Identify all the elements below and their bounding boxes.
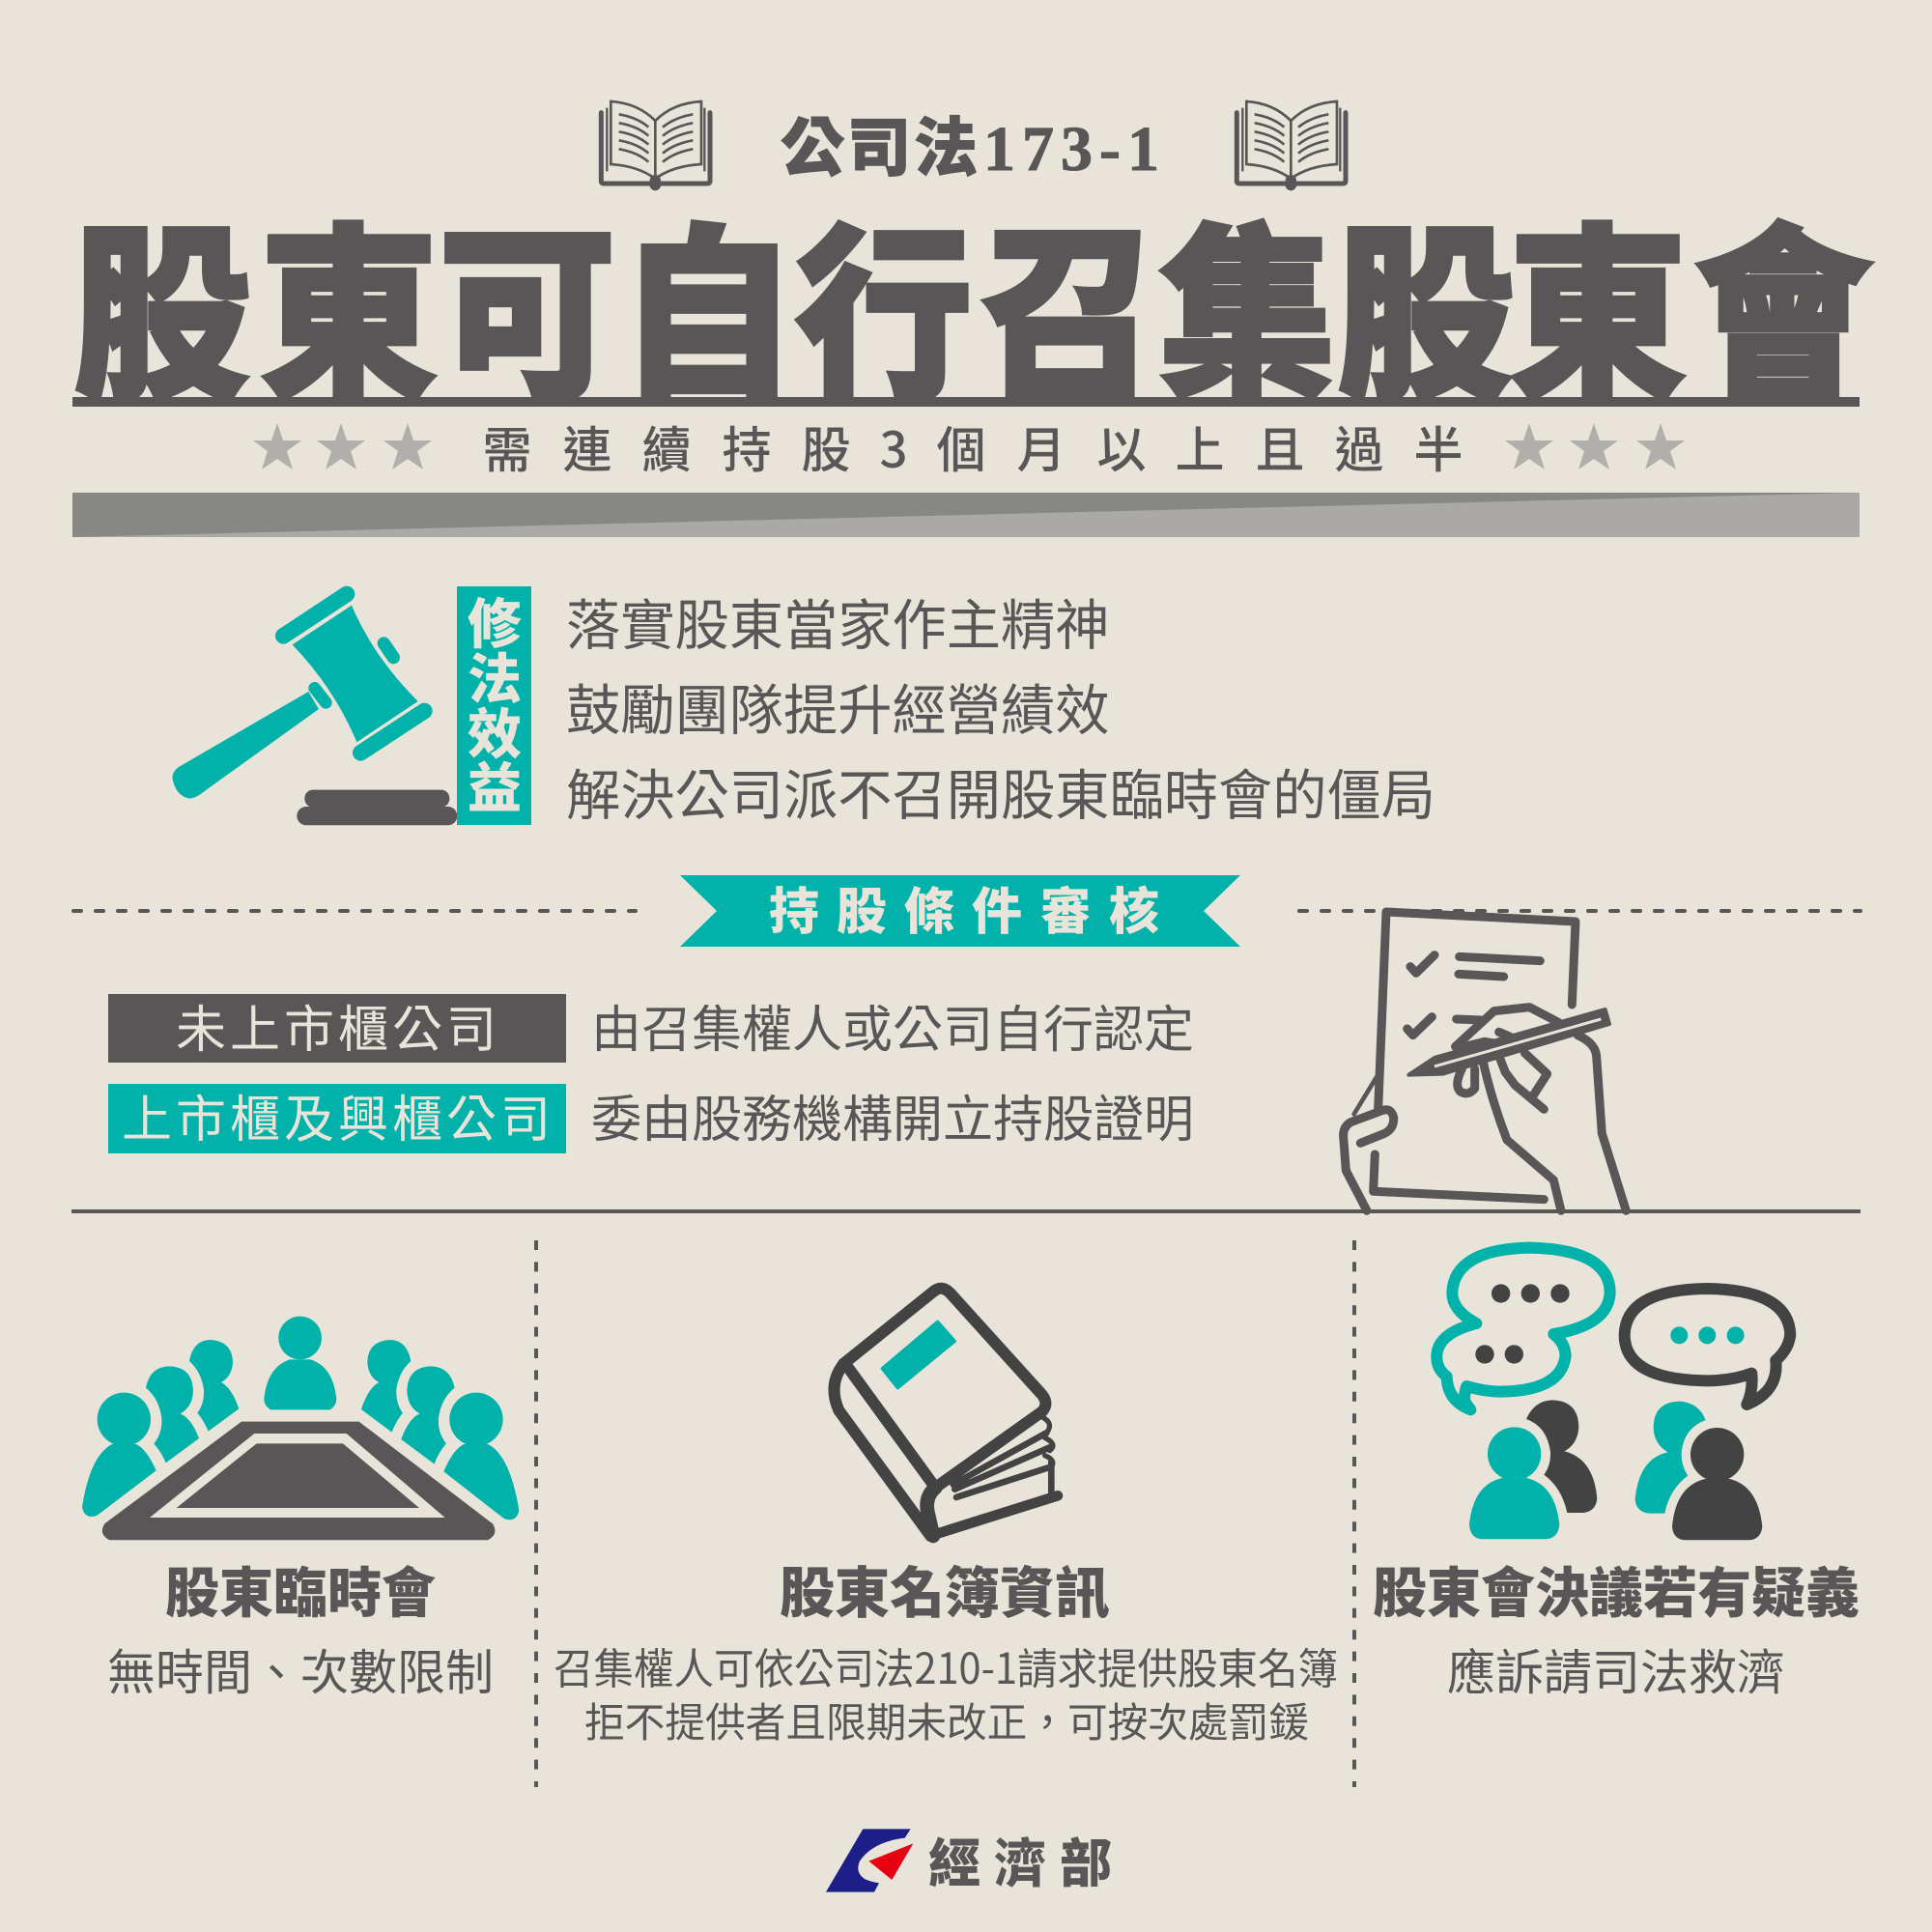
panel: amendment benefits [172,582,1435,831]
title: 股東可自行召集股東會 [73,164,1872,439]
subtitle with stars [253,411,1685,482]
subject: company act article: 173-1 [983,114,1166,185]
benefit list [566,582,1435,831]
row: listed companies [108,1079,1194,1153]
icon: stars left [253,423,432,469]
label: amendment benefits: 益 [468,746,522,824]
description: 應訴請司法救濟 [1447,1634,1785,1704]
benefit list: 落實股東當家作主精神 [566,582,1110,661]
icon: people discussing [1436,1248,1790,1540]
header [72,97,1872,537]
panel: extraordinary meeting [82,1317,519,1704]
divider band [72,493,1860,537]
row: unlisted companies: 由召集權人或公司自行認定 [591,989,1194,1062]
panel: resolution disputes [1373,1248,1860,1704]
label: amendment benefits: 修 [468,582,522,660]
banner heading: 持股條件審核 [769,871,1159,944]
description: 無時間、次數限制 [107,1634,494,1704]
icon: meeting table with people [82,1317,519,1540]
row: unlisted companies [108,989,1194,1063]
benefit list: 鼓勵團隊提升經營績效 [566,668,1110,746]
icon: book [835,1289,1058,1536]
icon: open book right [1236,101,1346,186]
ministry name: 經濟部 [928,1821,1112,1897]
description: 召集權人可依公司法210-1請求提供股東名簿 [554,1634,1338,1696]
row: listed companies: 委由股務機構開立持股證明 [591,1079,1194,1151]
heading: 股東會決議若有疑義 [1373,1550,1860,1629]
row: unlisted companies: 未上市櫃公司 [176,989,500,1062]
icon: open book left [601,101,710,186]
row: listed companies: 上市櫃及興櫃公司 [122,1079,554,1151]
icon: ministry emblem [826,1829,913,1892]
subject: company act article: 公司法 [781,97,978,189]
banner heading [680,871,1240,947]
icon: gavel [172,594,457,825]
label: amendment benefits: 效 [468,692,522,770]
label: amendment benefits [457,582,531,825]
heading: 股東臨時會 [165,1550,436,1629]
label: amendment benefits: 法 [468,637,522,715]
footer logo: Ministry of Economic Affairs [826,1821,1112,1897]
icon: stars right [1505,423,1685,469]
panel: shareholder register [554,1289,1338,1749]
heading: 股東名簿資訊 [780,1549,1110,1629]
panel: shareholding review [71,871,1861,1213]
benefit list: 解決公司派不召開股東臨時會的僵局 [566,753,1435,831]
description [554,1634,1338,1749]
subtitle text: 需連續持股3個月以上且過半 [482,411,1463,482]
icon: hand writing on checklist [1344,912,1626,1210]
description: 拒不提供者且限期未改正，可按次處罰鍰 [584,1690,1309,1749]
